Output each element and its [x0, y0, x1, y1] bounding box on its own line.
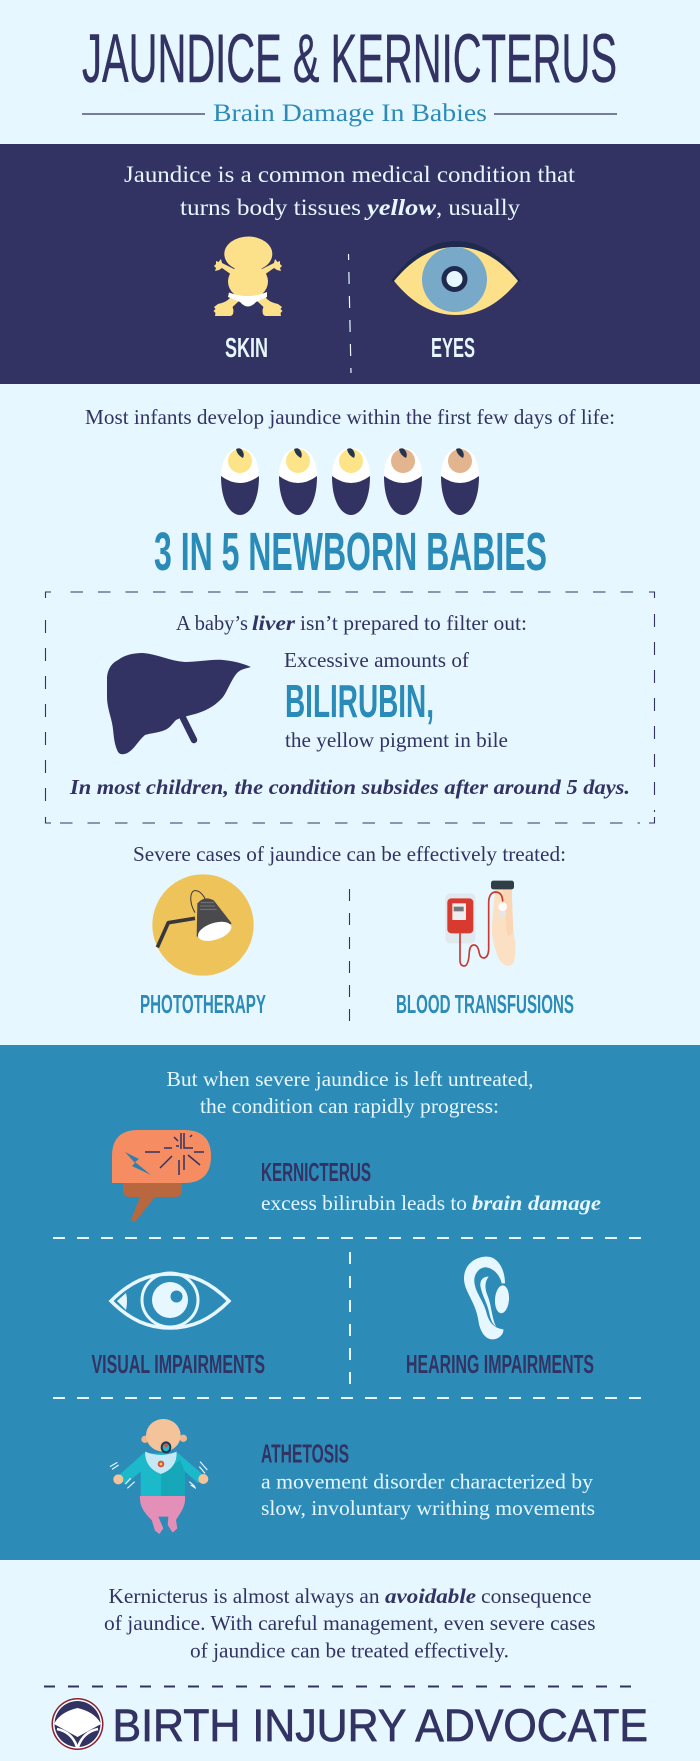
icon: damaged brain — [112, 1130, 211, 1222]
text: brain damage: brain damage — [472, 1191, 601, 1215]
icon: ear — [464, 1257, 510, 1339]
divider — [349, 1252, 351, 1385]
panel: dashed liver box — [46, 592, 654, 823]
text: movement disorder: a movement disorder characterized by — [261, 1470, 593, 1494]
text: condition subsides: In most children, the condition subsides after around 5 days. — [69, 775, 630, 799]
text: brain damage: excess bilirubin leads to — [261, 1191, 467, 1215]
label: skin: SKIN — [225, 332, 268, 363]
icon: lamp — [152, 874, 254, 976]
label: blood transfusions: BLOOD TRANSFUSIONS — [396, 989, 574, 1019]
intro text — [124, 162, 576, 220]
text: liver: liver — [252, 611, 296, 635]
intro text: , usually — [436, 195, 521, 220]
text: yellow pigment: the yellow pigment in bile — [285, 728, 508, 752]
text: conclusion: avoidable — [385, 1584, 476, 1608]
label: visual impairments: VISUAL IMPAIRMENTS — [92, 1349, 265, 1379]
logo mark — [52, 1698, 104, 1750]
subtitle: Brain Damage In Babies — [213, 100, 487, 127]
label: athetosis: ATHETOSIS — [261, 1440, 349, 1468]
logo wordmark: BIRTH INJURY ADVOCATE — [112, 1700, 648, 1751]
intro text: yellow — [364, 195, 437, 220]
text: brain damage — [261, 1191, 601, 1215]
text: untreated intro — [166, 1067, 534, 1118]
panel: definition — [0, 144, 700, 384]
label: kernicterus: KERNICTERUS — [261, 1157, 371, 1187]
text: movement disorder: slow, involuntary writhing movements — [261, 1496, 595, 1520]
text: conclusion: Kernicterus is almost always an — [108, 1584, 380, 1608]
panel: untreated consequences — [0, 1045, 700, 1560]
text: most infants: Most infants develop jaundice within the first few days of life: — [85, 405, 615, 429]
text: conclusion: of jaundice can be treated effectively. — [190, 1638, 509, 1662]
icon: blood transfusion — [445, 881, 515, 966]
icon: flailing baby — [110, 1419, 208, 1534]
label: phototherapy: PHOTOTHERAPY — [140, 989, 266, 1019]
intro text: Jaundice is a common medical condition that — [124, 162, 576, 187]
icon: yellow eye — [391, 241, 521, 315]
text: conclusion: consequence — [481, 1584, 592, 1608]
text: conclusion — [104, 1584, 596, 1662]
text: liver: isn’t prepared to filter out: — [300, 611, 527, 635]
icon: eye outline — [111, 1273, 229, 1328]
text: conclusion: of jaundice. With careful management, even severe cases — [104, 1611, 596, 1635]
text: movement disorder — [261, 1470, 595, 1520]
heading: bilirubin: BILIRUBIN, — [285, 675, 434, 727]
icon: yellow baby — [214, 236, 282, 316]
icon: five swaddled babies — [221, 448, 479, 515]
divider — [348, 889, 350, 1021]
text: excessive amounts: Excessive amounts of — [284, 648, 470, 672]
text: liver: A baby’s — [176, 611, 248, 635]
text: severe cases: Severe cases of jaundice can be effectively treated: — [133, 842, 566, 866]
text: liver — [176, 611, 527, 635]
text: untreated intro: the condition can rapidly progress: — [200, 1094, 499, 1118]
icon: liver — [107, 653, 251, 754]
intro text: turns body tissues — [180, 195, 361, 220]
text: untreated intro: But when severe jaundice is left untreated, — [166, 1067, 534, 1091]
divider — [348, 254, 351, 373]
label: eyes: EYES — [431, 332, 475, 363]
